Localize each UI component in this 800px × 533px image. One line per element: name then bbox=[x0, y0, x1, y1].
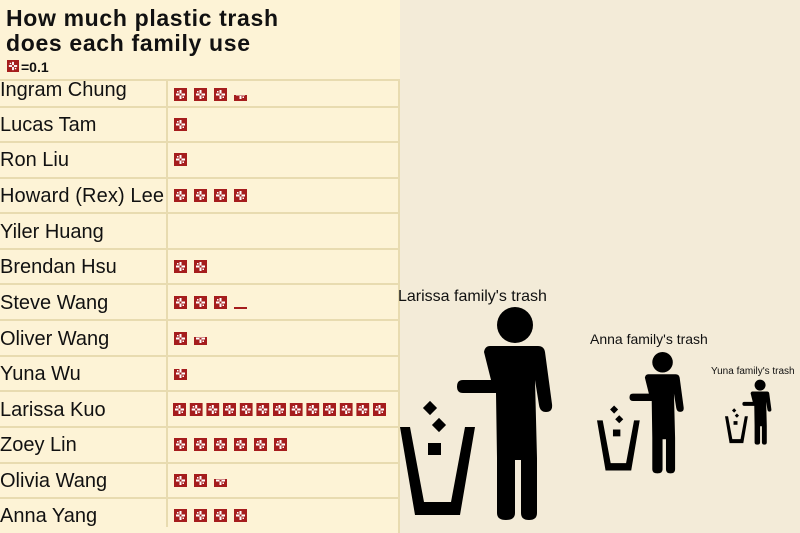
family names: Larissa Kuo bbox=[0, 399, 106, 421]
family names: Lucas Tam bbox=[0, 114, 96, 136]
family names: Oliver Wang bbox=[0, 328, 109, 350]
family names: Yuna Wu bbox=[0, 363, 81, 385]
icon: Larissa person with trash can bbox=[400, 307, 552, 520]
legend bbox=[7, 59, 49, 75]
label: Anna family's trash: Anna family's trash bbox=[590, 331, 708, 347]
legend: =0.1 bbox=[21, 59, 49, 75]
label: Larissa family's trash: Larissa family's trash bbox=[398, 288, 547, 305]
family names bbox=[0, 79, 164, 527]
family names: Howard (Rex) Lee bbox=[0, 185, 164, 207]
family names: Brendan Hsu bbox=[0, 256, 117, 278]
icon: Anna person with trash can bbox=[597, 352, 684, 473]
pictogram icons bbox=[173, 88, 386, 522]
family names: Ingram Chung bbox=[0, 79, 127, 101]
title: How much plastic trash bbox=[6, 5, 278, 31]
title: does each family use bbox=[6, 30, 250, 56]
family names: Steve Wang bbox=[0, 292, 108, 314]
title bbox=[6, 5, 278, 56]
table grid bbox=[0, 80, 400, 533]
family names: Ron Liu bbox=[0, 149, 69, 171]
family names: Zoey Lin bbox=[0, 434, 77, 456]
icon: Yuna person with trash can bbox=[725, 380, 771, 445]
family names: Yiler Huang bbox=[0, 221, 104, 243]
label: Yuna family's trash: Yuna family's trash bbox=[711, 366, 795, 377]
family names: Anna Yang bbox=[0, 505, 97, 527]
family names: Olivia Wang bbox=[0, 470, 107, 492]
panel: left table background bbox=[0, 0, 400, 533]
